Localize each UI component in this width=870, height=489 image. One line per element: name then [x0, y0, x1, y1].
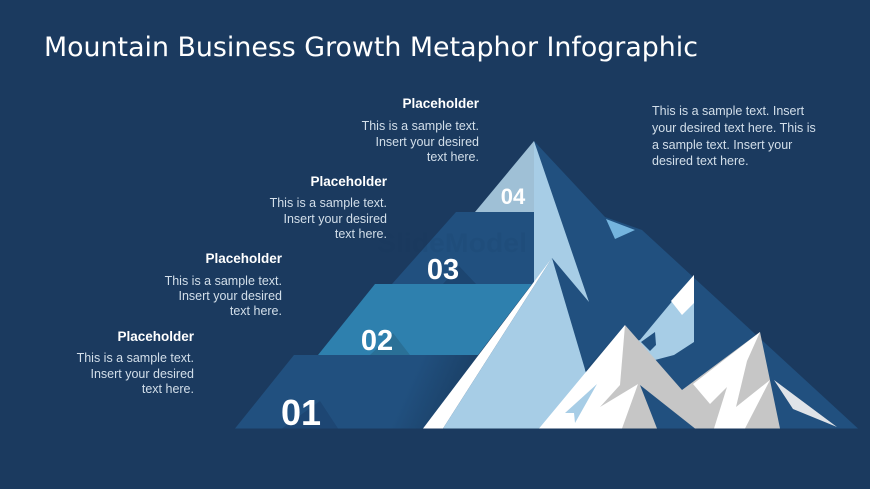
text block: placeholder 01: Insert your desired: [90, 367, 194, 381]
text block: right note: This is a sample text. Insert: [652, 104, 805, 118]
text block: placeholder 04: Insert your desired: [375, 135, 479, 149]
grey rock: [600, 325, 780, 428]
shadow behind snow peaks: [585, 325, 682, 400]
text block: placeholder 01: Placeholder: [117, 329, 195, 344]
mid ridge: [625, 275, 694, 360]
text block: placeholder 03: [270, 174, 388, 241]
central light peak: [534, 141, 589, 302]
text block: placeholder 04: This is a sample text.: [362, 119, 479, 133]
text block: right note: [652, 104, 816, 168]
text block: placeholder 02: This is a sample text.: [165, 274, 282, 288]
snow sliver: [774, 380, 837, 427]
text block: placeholder 02: text here.: [230, 304, 282, 318]
back mountain: [534, 141, 858, 428]
text block: placeholder 01: [77, 329, 195, 396]
snow peaks: [539, 325, 837, 428]
small light facet: [606, 219, 635, 239]
text block: right note: desired text here.: [652, 154, 749, 168]
text block: placeholder 03: Insert your desired: [283, 212, 387, 226]
text block: placeholder 02: Insert your desired: [178, 289, 282, 303]
text block: placeholder 03: Placeholder: [310, 174, 388, 189]
text block: placeholder 04: Placeholder: [402, 96, 480, 111]
snow left: [539, 325, 638, 428]
layer 03: [392, 212, 534, 286]
layer 02: [318, 284, 532, 357]
layer 01: 01: [281, 392, 321, 433]
text block: placeholder 03: This is a sample text.: [270, 196, 387, 210]
layer 04: 04: [501, 184, 526, 209]
layer 04: [475, 141, 534, 212]
text block: placeholder 03: text here.: [335, 227, 387, 241]
layer 03: 03: [427, 254, 459, 286]
text block: placeholder 02: [165, 251, 283, 318]
text block: placeholder 04: text here.: [427, 150, 479, 164]
watermark: SlideModel: [377, 228, 527, 258]
text block: right note: a sample text. Insert your: [652, 138, 792, 152]
mountain illustration: [235, 141, 858, 433]
title: Mountain Business Growth Metaphor Infographic: [44, 32, 698, 63]
layer 02: 02: [361, 325, 393, 357]
front peak: [423, 258, 600, 428]
text block: right note: your desired text here. This is: [652, 121, 816, 135]
text block: placeholder 04: [362, 96, 480, 164]
text block: placeholder 02: Placeholder: [205, 251, 283, 266]
snow right: [693, 332, 770, 428]
icon: ice facet: [565, 384, 597, 423]
layer 01: [235, 355, 480, 433]
text block: placeholder 01: This is a sample text.: [77, 351, 194, 365]
text block: placeholder 01: text here.: [142, 382, 194, 396]
